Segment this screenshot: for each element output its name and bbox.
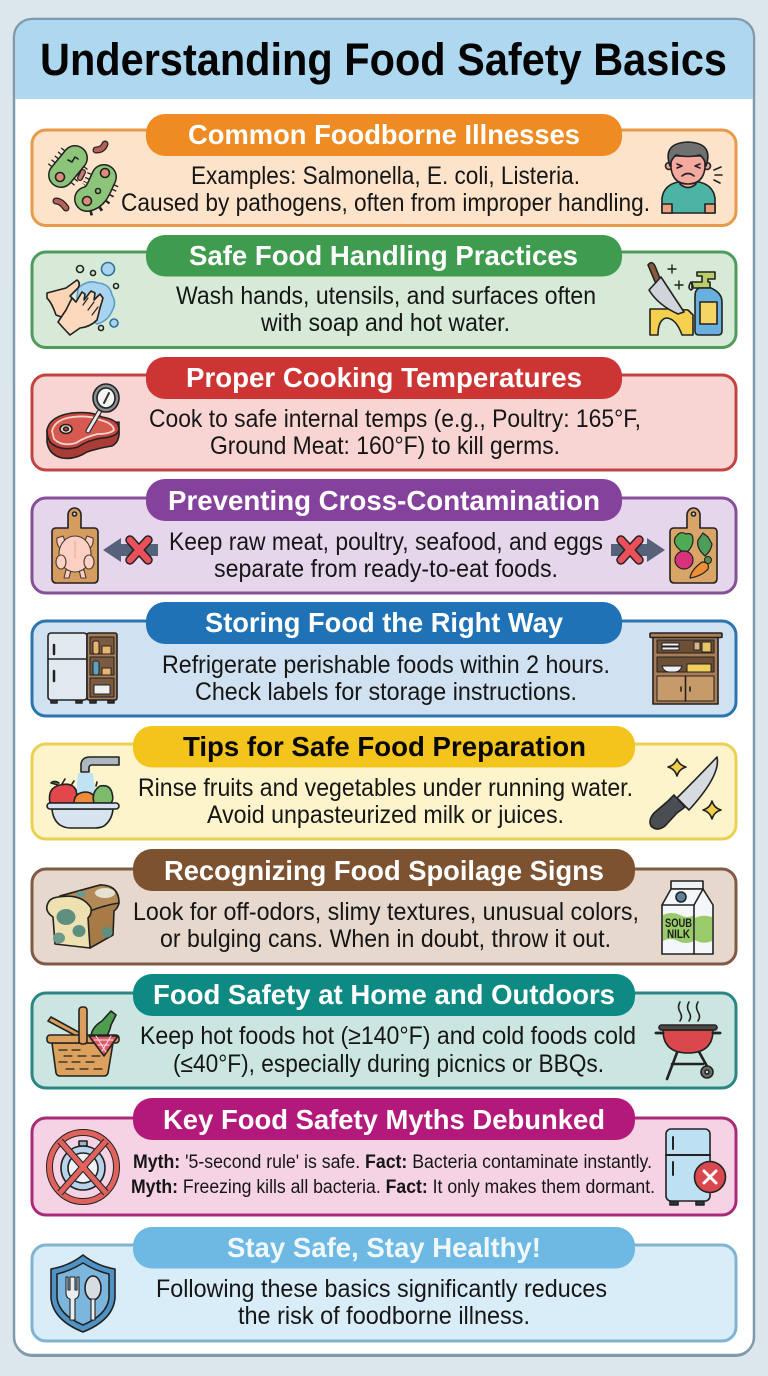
heading pill bbox=[146, 235, 622, 276]
heading pill: Tips for Safe Food Preparation bbox=[183, 731, 586, 762]
panel: safe food handling practices bbox=[32, 235, 736, 348]
title banner bbox=[16, 20, 752, 99]
heading pill bbox=[146, 357, 622, 399]
body text bbox=[156, 1275, 607, 1330]
icon: sour milk carton: NILK bbox=[667, 927, 690, 941]
icon: shield with fork and spoon bbox=[51, 1255, 115, 1332]
icon: kitchen knife with sparkles bbox=[650, 757, 721, 829]
heading pill bbox=[146, 114, 622, 156]
icon: sour milk carton bbox=[662, 881, 713, 954]
body text: or bulging cans. When in doubt, throw it out. bbox=[160, 925, 611, 953]
body text: Following these basics significantly reduces bbox=[156, 1275, 607, 1303]
body text bbox=[121, 162, 650, 217]
body text bbox=[131, 1152, 655, 1198]
heading pill: Storing Food the Right Way bbox=[205, 607, 563, 638]
heading pill: Preventing Cross-Contamination bbox=[168, 485, 600, 516]
body text bbox=[140, 1022, 636, 1078]
icon: barbecue grill bbox=[656, 1002, 720, 1079]
icon: blocked arrow right bbox=[611, 538, 665, 562]
panel: proper cooking temperatures bbox=[32, 357, 736, 470]
body text: Rinse fruits and vegetables under running water. bbox=[138, 774, 633, 802]
body text: Keep hot foods hot (≥140°F) and cold foods cold bbox=[140, 1022, 636, 1050]
body text bbox=[162, 651, 610, 706]
body text: Avoid unpasteurized milk or juices. bbox=[207, 801, 564, 829]
body text bbox=[133, 898, 639, 953]
heading pill: Common Foodborne Illnesses bbox=[188, 119, 580, 150]
body text: Keep raw meat, poultry, seafood, and eggs bbox=[169, 528, 603, 556]
body text: Check labels for storage instructions. bbox=[195, 678, 577, 706]
panel: storing food the right way bbox=[32, 602, 736, 716]
body text: Cook to safe internal temps (e.g., Poultry: 165°F, bbox=[149, 405, 641, 433]
heading pill: Key Food Safety Myths Debunked bbox=[163, 1104, 605, 1135]
panel: food safety at home and outdoors bbox=[32, 974, 736, 1088]
panel: preventing cross-contamination bbox=[32, 479, 736, 593]
icon: crossed-out stopwatch bbox=[50, 1132, 116, 1202]
body text: Myth: Freezing kills all bacteria. Fact: It only makes them dormant. bbox=[131, 1177, 655, 1198]
panel: stay safe, stay healthy bbox=[32, 1227, 736, 1341]
icon: knife and soap bbox=[648, 263, 722, 335]
icon: washing hands bbox=[47, 262, 118, 335]
body text: Myth: '5-second rule' is safe. Fact: Bacteria contaminate instantly. bbox=[133, 1152, 652, 1173]
body text: Wash hands, utensils, and surfaces often bbox=[176, 282, 596, 310]
body text bbox=[149, 405, 641, 460]
panel: key food safety myths debunked bbox=[32, 1098, 736, 1215]
heading pill bbox=[133, 974, 635, 1016]
icon: fridge with warning bbox=[666, 1129, 726, 1205]
icon: board with raw chicken bbox=[52, 508, 98, 583]
body text: Ground Meat: 160°F) to kill germs. bbox=[210, 432, 560, 460]
panel: tips for safe food preparation bbox=[32, 726, 736, 839]
heading pill: Stay Safe, Stay Healthy! bbox=[227, 1232, 541, 1263]
icon: bacteria bbox=[56, 144, 110, 208]
body text: separate from ready-to-eat foods. bbox=[214, 555, 558, 583]
icon: pantry cabinet bbox=[650, 633, 722, 704]
heading pill: Recognizing Food Spoilage Signs bbox=[164, 855, 604, 886]
icon: fridge and shelves bbox=[48, 633, 117, 703]
body text bbox=[176, 282, 596, 337]
heading pill bbox=[133, 1098, 635, 1140]
icon: bowl of produce under tap bbox=[47, 757, 119, 828]
body text: with soap and hot water. bbox=[260, 309, 510, 337]
heading pill bbox=[133, 726, 635, 768]
heading pill: Proper Cooking Temperatures bbox=[186, 362, 582, 393]
body text: (≤40°F), especially during picnics or BBQs. bbox=[173, 1050, 604, 1078]
icon: sour milk carton: SOUB bbox=[665, 916, 692, 930]
body text: Look for off-odors, slimy textures, unusual colors, bbox=[133, 898, 639, 926]
heading pill: Food Safety at Home and Outdoors bbox=[153, 979, 615, 1010]
body text bbox=[169, 528, 603, 583]
icon: picnic basket bbox=[47, 1007, 119, 1076]
icon: sick person bbox=[662, 142, 722, 213]
icon: mouldy bread bbox=[47, 885, 119, 948]
heading pill bbox=[146, 479, 622, 521]
body text bbox=[138, 774, 633, 829]
heading pill bbox=[133, 849, 635, 891]
body text: Caused by pathogens, often from improper handling. bbox=[121, 189, 650, 217]
heading pill bbox=[133, 1227, 635, 1268]
body text: Refrigerate perishable foods within 2 hours. bbox=[162, 651, 610, 679]
icon: blocked arrow left bbox=[103, 538, 158, 562]
icon: steak and thermometer bbox=[47, 384, 119, 458]
panel: recognizing food spoilage signs bbox=[32, 849, 736, 964]
icon: board with vegetables bbox=[670, 508, 717, 583]
body text: Examples: Salmonella, E. coli, Listeria. bbox=[191, 162, 580, 190]
heading pill: Safe Food Handling Practices bbox=[189, 240, 578, 271]
body text: the risk of foodborne illness. bbox=[238, 1302, 530, 1330]
panel: common foodborne illnesses bbox=[32, 114, 736, 226]
heading pill bbox=[146, 602, 622, 644]
title: Understanding Food Safety Basics bbox=[40, 34, 727, 85]
